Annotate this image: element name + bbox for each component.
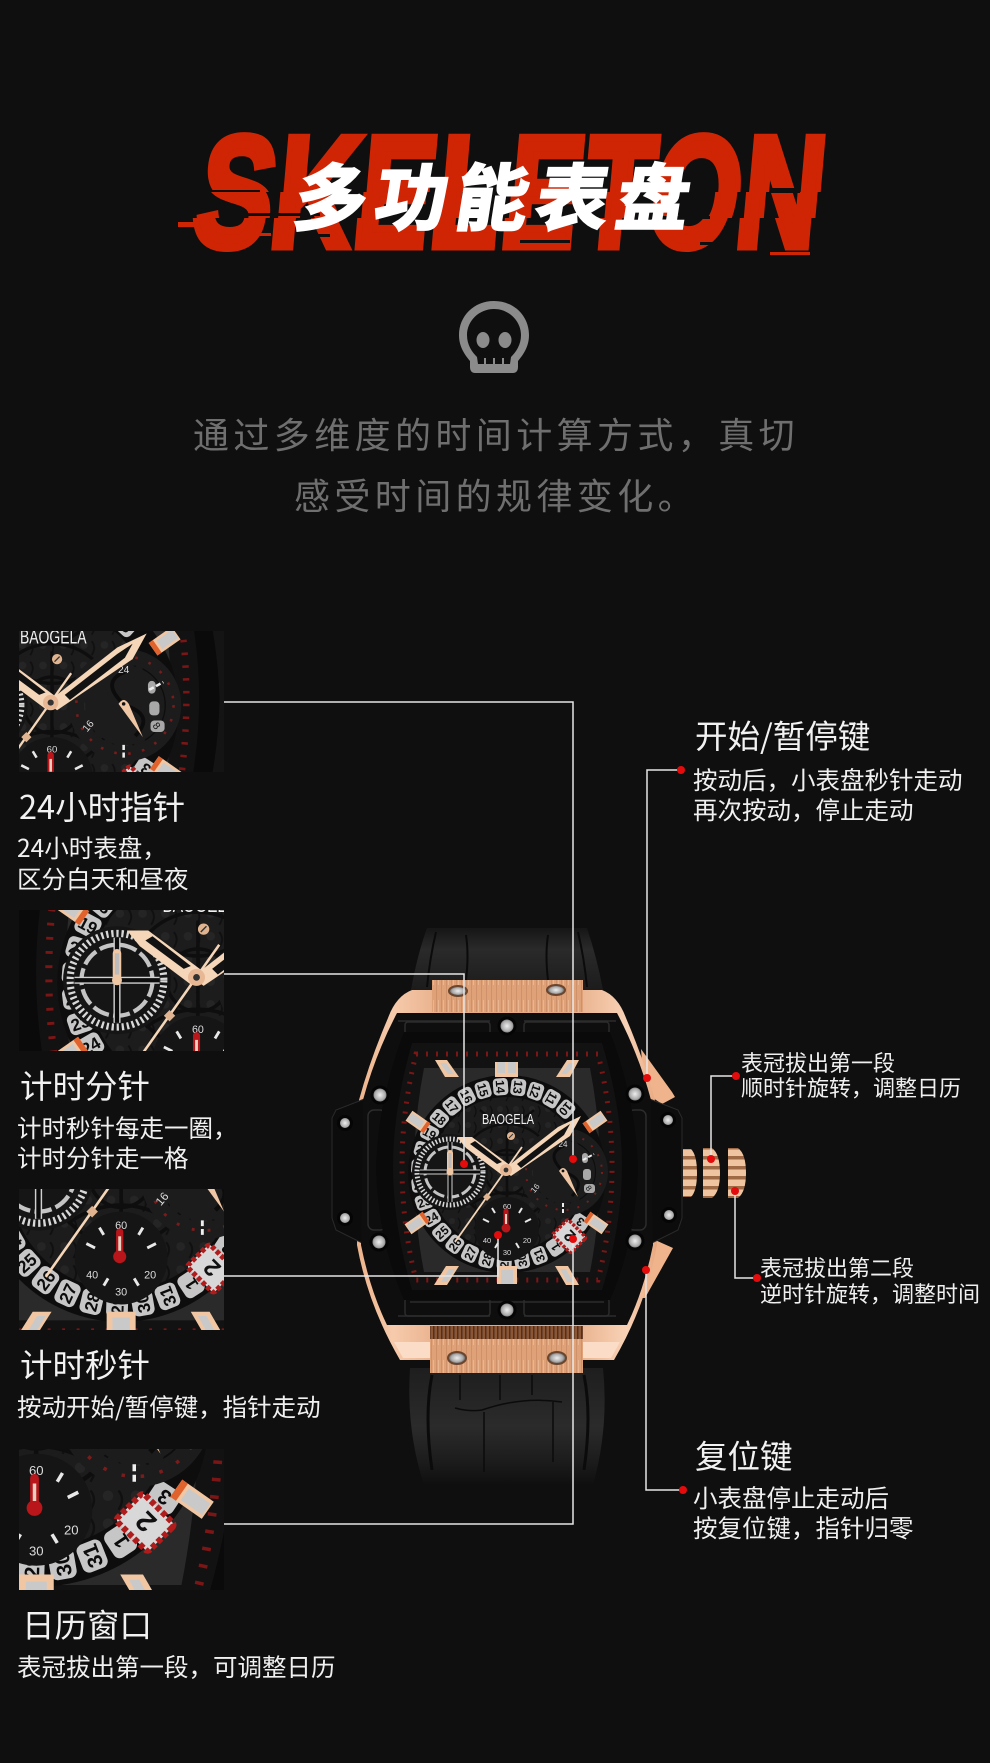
label: chrono minute hand: 计时分针走一格 (17, 1140, 188, 1175)
rose gold case (357, 990, 657, 1360)
label: reset button: 小表盘停止走动后 (693, 1480, 889, 1515)
title word: SKELETON: SKELETON (194, 105, 835, 281)
date tiles: 23 (416, 1194, 433, 1211)
top lug band (432, 980, 583, 1012)
watch strap bottom (409, 1368, 605, 1485)
label: start stop button: 按动后，小表盘秒针走动 (693, 762, 962, 797)
label: 24 hour hand: 24小时指针 (19, 782, 185, 829)
thumbnail: chrono second hand (19, 1189, 224, 1330)
left subdial (412, 1134, 488, 1210)
date tiles: 11 (542, 1089, 560, 1108)
thumbnail: 24 hour hand (19, 631, 190, 772)
bottom subdial: 30 (503, 1248, 511, 1257)
label: chrono minute hand: 计时秒针每走一圈， (17, 1110, 238, 1145)
watch illustration (332, 928, 746, 1485)
label: start stop button (693, 711, 962, 827)
label: reset button: 按复位键，指针归零 (693, 1510, 914, 1545)
title word: SKELETON (192, 132, 826, 252)
label: chrono second hand: 按动开始/暂停键，指针走动 (17, 1389, 321, 1424)
date tiles: 13 (510, 1080, 526, 1095)
date tiles: 3 (573, 1214, 587, 1229)
date window (552, 1219, 586, 1253)
label: crown second stop (760, 1251, 980, 1309)
label: chrono minute hand (17, 1061, 238, 1175)
date tiles: 28 (479, 1251, 496, 1267)
date tiles: 19 (420, 1124, 439, 1143)
date tiles: 17 (442, 1097, 461, 1116)
dial (376, 1032, 638, 1300)
date window: 2 (561, 1226, 579, 1244)
label: 24 hour hand (17, 782, 188, 896)
label: crown first stop (741, 1046, 961, 1103)
skeleton movement (425, 1092, 589, 1256)
date tiles: 15 (474, 1082, 491, 1099)
date tiles: 26 (446, 1235, 465, 1254)
date tiles: 10 (556, 1099, 575, 1119)
label: reset button: 复位键 (695, 1431, 793, 1478)
label: date window (17, 1600, 336, 1684)
glitch slits (200, 188, 800, 245)
label: date window: 表冠拔出第一段，可调整日历 (17, 1649, 336, 1684)
title word: SKELETON: SKELETON (191, 105, 832, 281)
bottom subdial (475, 1197, 539, 1261)
label: chrono second hand: 计时秒针 (20, 1340, 150, 1387)
logo BAOGELA: BAOGELA (482, 1111, 534, 1128)
label: reset button (693, 1431, 914, 1545)
label: start stop button: 再次按动，停止走动 (693, 792, 914, 827)
label: crown second stop: 逆时针旋转，调整时间 (760, 1277, 980, 1309)
black bezel (361, 1013, 653, 1325)
label: 24 hour hand: 区分白天和昼夜 (17, 861, 188, 896)
strap texture (427, 932, 588, 1472)
callout dots (460, 766, 761, 1494)
watch strap top (411, 928, 603, 990)
intro paragraph (193, 407, 799, 520)
date tiles: 18 (429, 1109, 449, 1129)
label: 24 hour hand: 24小时表盘， (17, 830, 167, 865)
hands (455, 1116, 581, 1242)
right subdial: 24 (559, 1140, 568, 1149)
date tiles: 29 (498, 1254, 512, 1268)
thumbnail: date window (19, 1449, 222, 1590)
label: crown first stop: 顺时针旋转，调整日历 (741, 1071, 961, 1103)
right subdial (526, 1134, 602, 1214)
date tiles: 25 (432, 1223, 452, 1242)
bottom lug band (430, 1326, 583, 1373)
band rivets (448, 985, 566, 1364)
title word: SKELETON: SKELETON (187, 105, 828, 281)
right pushers (640, 1049, 675, 1298)
label: start stop button: 开始/暂停键 (695, 711, 870, 758)
date tiles: 14 (493, 1080, 508, 1094)
date tiles: 31 (530, 1246, 548, 1264)
connector lines (224, 702, 757, 1524)
bottom subdial: 40 (483, 1236, 491, 1245)
date tiles: 12 (526, 1083, 544, 1100)
crowns (683, 1148, 746, 1198)
label: crown second stop: 表冠拔出第二段 (760, 1251, 914, 1283)
date tiles: 16 (457, 1087, 476, 1106)
label: date window: 日历窗口 (22, 1600, 152, 1647)
date tiles: 24 (422, 1209, 441, 1228)
bezel detail (368, 1021, 646, 1316)
date tiles (411, 1078, 591, 1270)
bottom subdial: 60 (503, 1202, 511, 1211)
date tiles: 30 (514, 1252, 530, 1268)
bezel screws (338, 1018, 676, 1318)
side ears (332, 1096, 682, 1248)
date tiles: 22 (413, 1177, 428, 1193)
date tiles: 1 (548, 1240, 563, 1253)
label: chrono minute hand: 计时分针 (20, 1061, 150, 1108)
case highlights (394, 1342, 620, 1358)
icon: skull (459, 301, 529, 373)
date ring (419, 1086, 595, 1262)
hour markers (405, 1060, 608, 1285)
intro paragraph: 通过多维度的时间计算方式，真切 (193, 407, 799, 459)
bottom subdial: 20 (523, 1236, 531, 1245)
logo screw (507, 1132, 515, 1140)
date tiles: 21 (413, 1160, 427, 1175)
right subdial: 16 (529, 1182, 542, 1195)
date tiles: 27 (461, 1244, 480, 1263)
glitch red bars (178, 222, 810, 255)
title word: 多功能表盘: 多功能表盘 (288, 141, 707, 245)
date tiles: 20 (414, 1141, 432, 1159)
thumbnail: chrono minute hand (45, 910, 224, 1051)
label: chrono second hand (17, 1340, 321, 1424)
intro paragraph: 感受时间的规律变化。 (294, 468, 698, 520)
right subdial: 8 (584, 1184, 594, 1193)
label: crown first stop: 表冠拔出第一段 (741, 1046, 895, 1078)
title: SKELETON glitch lettering with Chinese heading (178, 132, 826, 255)
